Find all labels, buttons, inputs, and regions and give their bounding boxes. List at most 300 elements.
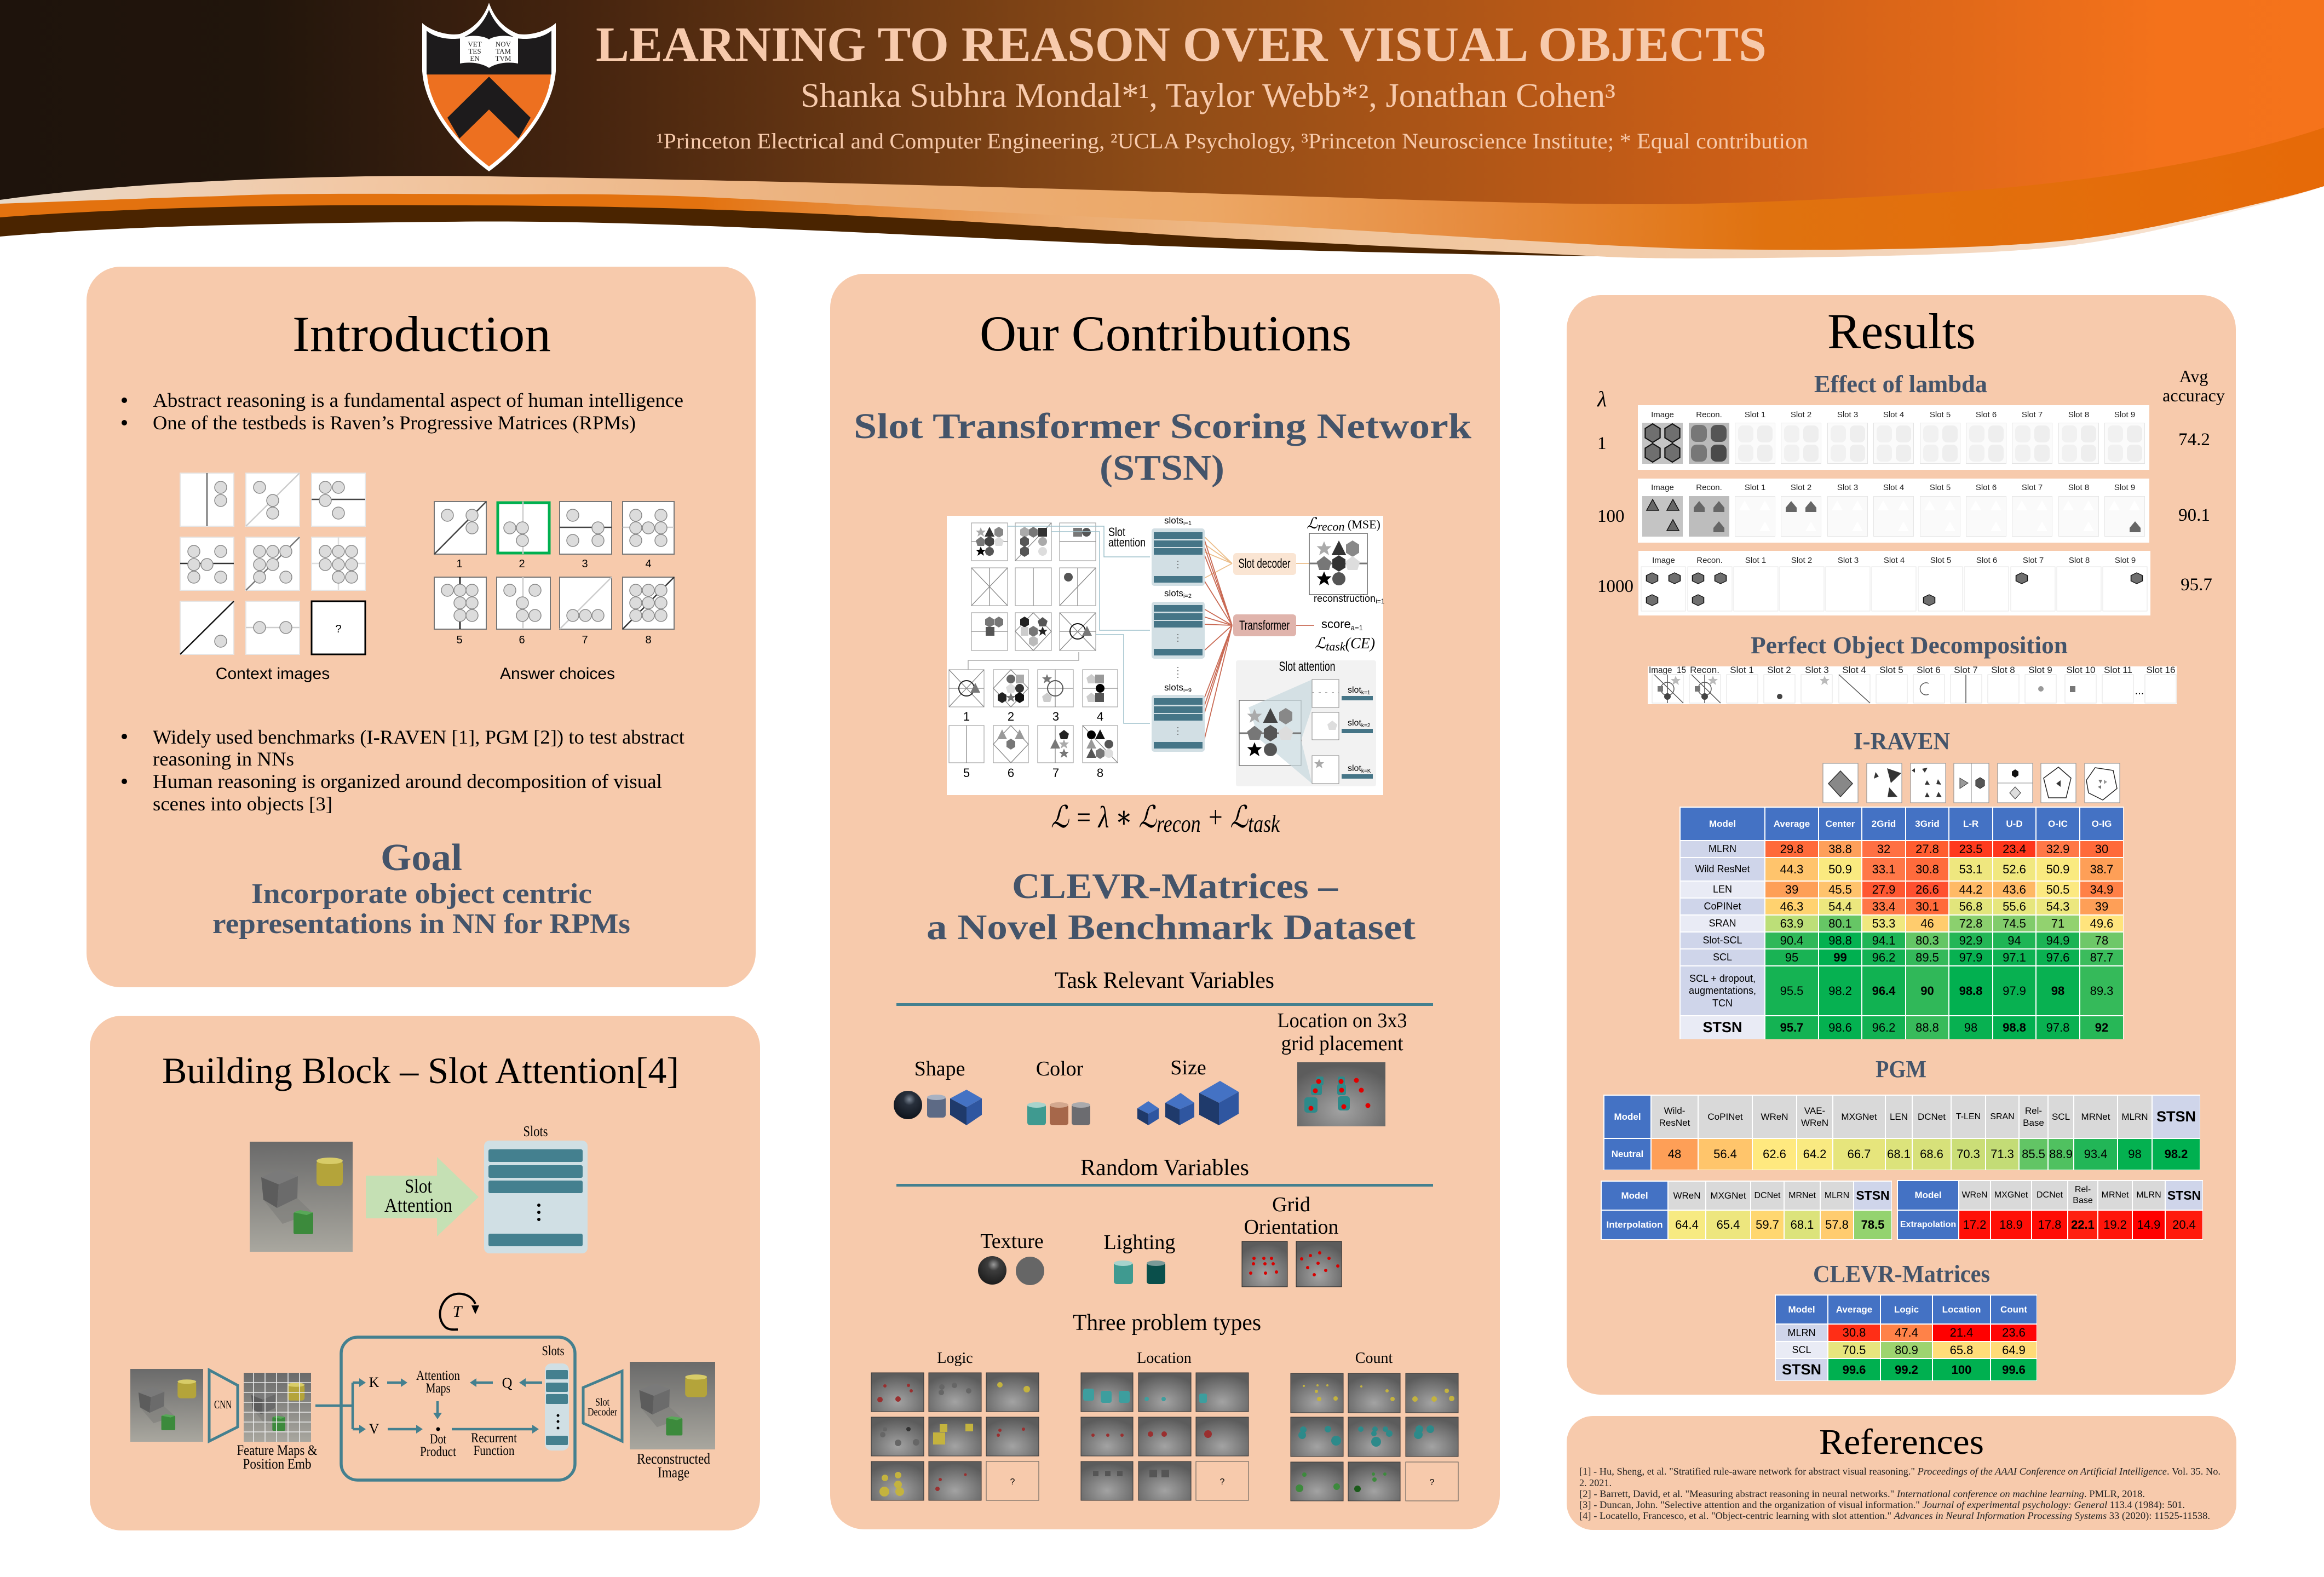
module labels: Recurrent xyxy=(471,1431,517,1446)
goal heading: Goal xyxy=(381,837,462,879)
table: I-RAVEN results: 98.2 xyxy=(1828,984,1852,998)
heading: three problem types: Three problem types xyxy=(1073,1310,1261,1336)
table: PGM extrapolation: Rel- xyxy=(2075,1185,2091,1194)
figure: answer choices: 8 xyxy=(645,634,652,646)
module labels: K xyxy=(369,1374,379,1390)
label: reconstructed image xyxy=(637,1451,710,1481)
labels: losses and outputs: task xyxy=(1326,640,1346,653)
labels: losses and outputs: (CE) xyxy=(1345,635,1375,652)
icon: Princeton shield: TAM xyxy=(496,47,511,55)
reference list: 2. 2021. xyxy=(1579,1477,1612,1488)
labels: random: Lighting xyxy=(1104,1231,1175,1254)
table: PGM neutral: 85.5 xyxy=(2022,1147,2045,1161)
strip: lambda 1: Slot 3 xyxy=(1837,410,1858,419)
loss formula: + ℒ xyxy=(1201,801,1249,834)
table: CLEVR-Matrices: 99.6 xyxy=(2002,1363,2026,1377)
subheading: STSN: Slot Transformer Scoring Network xyxy=(854,406,1471,446)
answer numbers: 3 xyxy=(1052,710,1059,723)
strip: lambda 1 xyxy=(1638,405,2149,470)
table: I-RAVEN results: 74.5 xyxy=(2003,917,2026,930)
table: I-RAVEN results: SCL xyxy=(1713,952,1732,963)
column label: lambda: λ xyxy=(1597,387,1607,411)
label: feature maps: Position Emb xyxy=(243,1456,311,1472)
slot stacks: slots xyxy=(1164,515,1183,526)
strip: decomposition: Slot 1 xyxy=(1730,665,1754,675)
labels: losses and outputs: (MSE) xyxy=(1344,517,1380,531)
table: PGM neutral: DCNet xyxy=(1918,1112,1946,1122)
table: PGM interpolation: 78.5 xyxy=(1861,1218,1884,1231)
strip: lambda 1: Slot 4 xyxy=(1883,410,1904,419)
heading: task relevant variables: Task Relevant Variables xyxy=(1055,968,1274,993)
table: I-RAVEN results: augmentations, xyxy=(1689,985,1756,996)
strip: lambda 1000: Slot 3 xyxy=(1838,556,1859,565)
table: PGM neutral: 93.4 xyxy=(2084,1147,2107,1161)
table: I-RAVEN results: TCN xyxy=(1712,998,1733,1009)
strip: decomposition: Slot 4 xyxy=(1842,665,1866,675)
table: I-RAVEN results: 97.9 xyxy=(2003,984,2026,998)
table: CLEVR-Matrices: 30.8 xyxy=(1843,1326,1866,1339)
answer numbers: 4 xyxy=(1097,710,1103,723)
table: PGM extrapolation: DCNet xyxy=(2037,1190,2063,1200)
table: I-RAVEN results: 96.2 xyxy=(1872,951,1895,964)
table: I-RAVEN results: U-D xyxy=(2006,819,2023,829)
table: I-RAVEN results: O-IG xyxy=(2092,819,2112,829)
labels: losses and outputs: reconstruction xyxy=(1314,593,1376,604)
table: I-RAVEN results: 38.7 xyxy=(2090,862,2113,876)
table: I-RAVEN results: 32.9 xyxy=(2046,842,2069,856)
heading: References xyxy=(1819,1422,1984,1462)
table: I-RAVEN results: 98 xyxy=(2051,984,2064,998)
table: I-RAVEN results: SRAN xyxy=(1709,918,1736,929)
table: PGM interpolation xyxy=(1600,1180,1892,1240)
slot stacks: i=2 xyxy=(1183,593,1192,600)
table: CLEVR-Matrices: Average xyxy=(1836,1304,1872,1315)
table: PGM neutral: MXGNet xyxy=(1841,1112,1877,1122)
labels: slot attention: Slot xyxy=(1108,525,1125,539)
table: I-RAVEN results: 50.5 xyxy=(2046,883,2069,896)
strip: lambda 1000: Recon. xyxy=(1696,556,1723,565)
module labels: Function xyxy=(473,1443,515,1458)
table: PGM interpolation: 65.4 xyxy=(1717,1218,1740,1231)
transformer box xyxy=(1233,614,1296,636)
table: I-RAVEN results: 53.3 xyxy=(1872,917,1895,930)
connectors xyxy=(968,526,1314,745)
labels: task relevant: Location on 3x3 xyxy=(1277,1009,1407,1032)
table: PGM neutral: 56.4 xyxy=(1713,1147,1737,1161)
strip: lambda 1: Slot 9 xyxy=(2114,410,2135,419)
accuracy values: 95.7 xyxy=(2181,575,2212,595)
rule xyxy=(896,1003,1433,1006)
table: PGM neutral: 88.9 xyxy=(2049,1147,2073,1161)
heading: random variables: Random Variables xyxy=(1080,1155,1249,1181)
label: feature maps: Feature Maps & xyxy=(237,1442,318,1458)
table: PGM neutral: Wild- xyxy=(1664,1106,1685,1116)
table: I-RAVEN results: STSN xyxy=(1702,1019,1742,1035)
objects: lighting xyxy=(1114,1261,1165,1284)
inset: slot attention: k=2 xyxy=(1361,723,1371,729)
module labels: Slots xyxy=(542,1344,564,1359)
answer numbers: 5 xyxy=(963,766,970,780)
table: CLEVR-Matrices: STSN xyxy=(1782,1361,1821,1378)
column label: accuracy: accuracy xyxy=(2162,385,2225,405)
figure: answer choices: 1 xyxy=(456,558,463,570)
table: PGM extrapolation: Extrapolation xyxy=(1900,1220,1956,1229)
table: I-RAVEN results: 34.9 xyxy=(2090,883,2113,896)
heading: Our Contributions xyxy=(980,306,1351,361)
table: PGM neutral: SCL xyxy=(2052,1112,2070,1122)
figure: answer choices: 2 xyxy=(519,558,525,570)
slot decoder: Slot xyxy=(595,1396,609,1408)
strip: lambda 1: Slot 7 xyxy=(2022,410,2043,419)
strip: decomposition: Slot 6 xyxy=(1917,665,1941,675)
table: CLEVR-Matrices: 70.5 xyxy=(1843,1343,1866,1357)
labels: problem types: Count xyxy=(1355,1350,1393,1367)
table: I-RAVEN results: 98.8 xyxy=(1828,934,1852,947)
table: CLEVR-Matrices: Logic xyxy=(1894,1304,1919,1315)
table: PGM extrapolation: 14.9 xyxy=(2137,1218,2160,1231)
table: PGM extrapolation: Model xyxy=(1914,1190,1942,1200)
table: PGM interpolation: 64.4 xyxy=(1675,1218,1699,1231)
strip: decomposition: ... xyxy=(2135,685,2144,697)
table: PGM neutral: Base xyxy=(2023,1117,2044,1128)
slot stacks xyxy=(1152,515,1205,752)
accuracy values xyxy=(2178,430,2212,595)
table: PGM extrapolation: MLRN xyxy=(2136,1190,2161,1200)
table: PGM neutral: SRAN xyxy=(1990,1112,2015,1121)
caption: answer choices: Answer choices xyxy=(500,665,615,683)
table: PGM interpolation: 59.7 xyxy=(1756,1218,1779,1231)
labels: task relevant: grid placement xyxy=(1281,1032,1403,1055)
strip: lambda 100: Image xyxy=(1651,483,1674,492)
table: CLEVR-Matrices: Count xyxy=(2000,1304,2027,1315)
answer numbers: 1 xyxy=(963,710,970,723)
bullet list: bottom: scenes into objects [3] xyxy=(153,793,332,815)
table: PGM neutral xyxy=(1603,1094,2200,1170)
goal statement xyxy=(212,878,630,940)
figure: context images: ? xyxy=(335,623,342,635)
strip: decomposition: Slot 8 xyxy=(1991,665,2015,675)
module labels: Q xyxy=(502,1375,513,1391)
table: I-RAVEN results: 89.3 xyxy=(2090,984,2113,998)
table: CLEVR-Matrices: 100 xyxy=(1952,1363,1971,1377)
table: I-RAVEN results: 33.4 xyxy=(1872,900,1895,913)
strip: lambda 100: Slot 1 xyxy=(1745,483,1765,492)
icon: Princeton shield: NOV xyxy=(496,40,511,48)
table: I-RAVEN results: 29.8 xyxy=(1780,842,1803,856)
table: I-RAVEN results: 23.5 xyxy=(1959,842,1982,856)
table: CLEVR-Matrices: 21.4 xyxy=(1950,1326,1973,1339)
table: I-RAVEN results: 97.8 xyxy=(2046,1021,2069,1034)
subheading: I-RAVEN: I-RAVEN xyxy=(1854,728,1950,755)
strip: lambda 1: Image xyxy=(1651,410,1674,419)
table: I-RAVEN results: LEN xyxy=(1713,884,1732,895)
arrow: slot attention: Attention xyxy=(384,1194,452,1216)
table: PGM neutral: 48 xyxy=(1668,1147,1681,1161)
table: CLEVR-Matrices: 80.9 xyxy=(1895,1343,1918,1357)
inset: slot attention xyxy=(1236,659,1376,786)
grid: count: ? xyxy=(1430,1478,1435,1487)
rule xyxy=(896,1184,1433,1187)
accuracy values: 90.1 xyxy=(2178,505,2210,525)
strip: decomposition: Slot 16 xyxy=(2147,665,2175,675)
table: I-RAVEN results: 38.8 xyxy=(1828,842,1852,856)
table: I-RAVEN results: 97.1 xyxy=(2003,951,2026,964)
slot stacks: i=9 xyxy=(1183,687,1192,694)
icon: Princeton shield: EN xyxy=(470,54,480,62)
strip: lambda 100: Slot 5 xyxy=(1930,483,1951,492)
loss formula: ℒ = λ ∗ ℒ xyxy=(1051,801,1181,834)
table: PGM extrapolation: 17.8 xyxy=(2038,1218,2061,1231)
strip: lambda 100: Slot 9 xyxy=(2114,483,2135,492)
labels: slot attention: attention xyxy=(1108,536,1146,549)
subheading: PGM: PGM xyxy=(1876,1056,1926,1083)
table: CLEVR-Matrices: 65.8 xyxy=(1950,1343,1973,1357)
labels: problem types: Location xyxy=(1137,1350,1192,1367)
labels: problem types xyxy=(937,1350,1393,1367)
slot attention module box xyxy=(341,1337,575,1480)
table: I-RAVEN results: 46 xyxy=(1920,917,1934,930)
subheading: effect of lambda: Effect of lambda xyxy=(1814,371,1987,398)
table: PGM neutral: Rel- xyxy=(2025,1106,2042,1116)
image: reconstructed xyxy=(630,1362,715,1449)
table: PGM neutral: Neutral xyxy=(1612,1149,1643,1159)
table: I-RAVEN results: 27.8 xyxy=(1915,842,1939,856)
table: I-RAVEN results: 30.1 xyxy=(1915,900,1939,913)
goal statement: representations in NN for RPMs xyxy=(212,908,630,940)
table: I-RAVEN results: 52.6 xyxy=(2003,862,2026,876)
subheading: CLEVR-Matrices results: CLEVR-Matrices xyxy=(1813,1261,1990,1287)
table: PGM neutral: 98.2 xyxy=(2165,1147,2188,1161)
dot product marker xyxy=(436,1427,440,1431)
strip: lambda 1000: Image xyxy=(1652,556,1675,565)
table: I-RAVEN results: 90 xyxy=(1920,984,1934,998)
icon: Princeton shield: TES xyxy=(468,47,481,55)
slot stacks: i=1 xyxy=(1183,520,1192,527)
bullet list: bottom: Human reasoning is organized around decomposition of visual xyxy=(153,770,662,792)
table: I-RAVEN results: CoPINet xyxy=(1704,901,1741,912)
strip: lambda 1000: Slot 2 xyxy=(1791,556,1812,565)
table: PGM extrapolation: 20.4 xyxy=(2172,1218,2196,1231)
table: I-RAVEN results: 39 xyxy=(2095,900,2108,913)
bullet list: bottom: reasoning in NNs xyxy=(153,748,294,770)
table: PGM interpolation: MRNet xyxy=(1788,1190,1816,1200)
table: I-RAVEN results: 95.5 xyxy=(1780,984,1803,998)
subheading: CLEVR-Matrices: a Novel Benchmark Dataset xyxy=(927,907,1416,947)
module labels: Product xyxy=(420,1444,456,1459)
icon: iteration loop T: T xyxy=(453,1303,463,1321)
objects: color xyxy=(1027,1102,1090,1125)
reference list: [2] - Barrett, David, et al. "Measuring abstract reasoning in neural networks." International conference on machine learning . PMLR, 2018. xyxy=(1579,1488,2145,1499)
slot stacks: slots xyxy=(1164,682,1183,693)
table: I-RAVEN results: 50.9 xyxy=(1828,862,1852,876)
reconstruction panel xyxy=(1309,533,1367,595)
table: PGM neutral: CoPINet xyxy=(1707,1112,1743,1122)
strip: lambda 100: Slot 4 xyxy=(1883,483,1904,492)
inset: slot attention: slot xyxy=(1348,718,1361,728)
strip: lambda 1: Slot 8 xyxy=(2068,410,2089,419)
label: reconstructed image: Reconstructed xyxy=(637,1451,710,1467)
panel: building block slot attention xyxy=(90,1016,760,1530)
strip: lambda 1000: Slot 8 xyxy=(2069,556,2090,565)
table: I-RAVEN results: 80.1 xyxy=(1828,917,1852,930)
transformer box: Transformer xyxy=(1239,618,1290,633)
table: I-RAVEN results: 87.7 xyxy=(2090,951,2113,964)
affiliations: ¹Princeton Electrical and Computer Engineering, ²UCLA Psychology, ³Princeton Neuroscience Institute; * Equal contribution xyxy=(657,129,1808,153)
table: I-RAVEN results: 99 xyxy=(1833,951,1847,964)
table: PGM neutral: MRNet xyxy=(2081,1112,2110,1122)
labels: task relevant: Color xyxy=(1036,1057,1084,1080)
strip: decomposition: Slot 5 xyxy=(1879,665,1903,675)
table: I-RAVEN results: 54.3 xyxy=(2046,900,2069,913)
slot decoder xyxy=(583,1371,622,1441)
grid: logic: ? xyxy=(1010,1477,1015,1487)
labels: losses and outputs: i=1 xyxy=(1376,597,1385,605)
strip: lambda 1000: Slot 9 xyxy=(2115,556,2136,565)
labels: random: Texture xyxy=(980,1230,1044,1253)
grid: count xyxy=(1291,1373,1458,1501)
table: I-RAVEN results: 2Grid xyxy=(1872,819,1896,829)
labels: random: Grid xyxy=(1272,1193,1310,1216)
table: I-RAVEN results: Wild ResNet xyxy=(1695,864,1750,874)
strip: lambda 1: Slot 6 xyxy=(1976,410,1997,419)
table: I-RAVEN results: 53.1 xyxy=(1959,862,1982,876)
table: I-RAVEN results: 33.1 xyxy=(1872,862,1895,876)
figure: answer choices: 4 xyxy=(645,558,652,570)
goal statement: Incorporate object centric xyxy=(251,878,592,910)
subheading: CLEVR-Matrices xyxy=(927,866,1416,947)
table: I-RAVEN results: 88.8 xyxy=(1915,1021,1939,1034)
strip: lambda 1000: Slot 6 xyxy=(1976,556,1997,565)
inset: slot attention: slot xyxy=(1348,686,1361,695)
bullet list: bottom xyxy=(122,726,684,815)
loss formula: task xyxy=(1248,810,1280,837)
table: I-RAVEN results: 97.9 xyxy=(1959,951,1982,964)
table: PGM interpolation: DCNet xyxy=(1754,1190,1781,1200)
strip: decomposition: Slot 10 xyxy=(2067,665,2095,675)
table: PGM neutral: STSN xyxy=(2156,1108,2196,1125)
slots stack: Slots xyxy=(524,1123,548,1139)
table: PGM neutral: T-LEN xyxy=(1956,1112,1981,1121)
column label: accuracy: Avg xyxy=(2179,366,2208,386)
labels: task relevant: Shape xyxy=(914,1057,965,1080)
arrow: slot attention: Slot xyxy=(405,1175,432,1197)
table: I-RAVEN results: Average xyxy=(1774,819,1810,829)
table: I-RAVEN results: 89.5 xyxy=(1915,951,1939,964)
table: PGM interpolation: MXGNet xyxy=(1710,1190,1746,1201)
labels: losses and outputs: ℒ xyxy=(1315,635,1326,652)
labels: losses and outputs: ℒ xyxy=(1307,515,1318,532)
icon: iteration loop T xyxy=(440,1294,479,1329)
table: PGM interpolation: 68.1 xyxy=(1791,1218,1814,1231)
bullet list: top: One of the testbeds is Raven’s Progressive Matrices (RPMs) xyxy=(153,412,636,434)
table: PGM neutral: ResNet xyxy=(1659,1117,1690,1128)
table: I-RAVEN results: 46.3 xyxy=(1780,900,1803,913)
table: I-RAVEN results: 32 xyxy=(1877,842,1890,856)
inset: slot attention: k=K xyxy=(1361,768,1371,774)
table: PGM interpolation: STSN xyxy=(1856,1188,1890,1202)
accuracy values: 74.2 xyxy=(2178,430,2210,450)
strip: decomposition: Slot 3 xyxy=(1805,665,1829,675)
labels: random: Orientation xyxy=(1244,1216,1339,1239)
labels: losses and outputs xyxy=(1307,515,1385,653)
caption: context images: Context images xyxy=(216,665,330,683)
icons: I-RAVEN configurations xyxy=(1823,763,2120,803)
table: CLEVR-Matrices: Location xyxy=(1942,1304,1981,1315)
module labels: Maps xyxy=(426,1381,450,1396)
bullet list: top xyxy=(122,389,683,434)
table: PGM extrapolation: 18.9 xyxy=(1999,1218,2023,1231)
table: I-RAVEN results: 78 xyxy=(2095,934,2108,947)
reference list: [4] - Locatello, Francesco, et al. "Object-centric learning with slot attention." Advances in Neural Information Processing Systems 33 (2020): 11525-11538. xyxy=(1579,1510,2210,1522)
table: PGM extrapolation xyxy=(1896,1179,2203,1240)
table: CLEVR-Matrices: 47.4 xyxy=(1895,1326,1918,1339)
table: I-RAVEN results: 92.9 xyxy=(1959,934,1982,947)
icon: Princeton shield: VET xyxy=(468,40,482,48)
table: PGM neutral: LEN xyxy=(1890,1112,1908,1122)
table: I-RAVEN results: 56.8 xyxy=(1959,900,1982,913)
table: I-RAVEN results: 44.3 xyxy=(1780,862,1803,876)
answer numbers: 2 xyxy=(1008,710,1014,723)
table: I-RAVEN results: O-IC xyxy=(2048,819,2068,829)
grid: location: ? xyxy=(1220,1477,1225,1487)
table: I-RAVEN results: L-R xyxy=(1963,819,1978,829)
table: CLEVR-Matrices: 99.2 xyxy=(1895,1363,1918,1377)
table: CLEVR-Matrices: 99.6 xyxy=(1843,1363,1866,1377)
table: I-RAVEN results: 44.2 xyxy=(1959,883,1982,896)
slot decoder box xyxy=(1233,553,1296,575)
table: PGM extrapolation: MXGNet xyxy=(1994,1190,2028,1200)
strip: lambda 1: Slot 5 xyxy=(1930,410,1951,419)
image: input scene xyxy=(250,1142,353,1252)
strip: decomposition: Slot 9 xyxy=(2028,665,2052,675)
table: I-RAVEN results: 27.9 xyxy=(1872,883,1895,896)
strip: lambda 100: Slot 7 xyxy=(2022,483,2043,492)
table: I-RAVEN results: 23.4 xyxy=(2003,842,2026,856)
lambda values: 100 xyxy=(1597,507,1624,526)
table: PGM neutral: 71.3 xyxy=(1991,1147,2014,1161)
table: PGM neutral: VAE- xyxy=(1804,1106,1825,1116)
panel: introduction xyxy=(87,267,756,987)
label: reconstructed image: Image xyxy=(658,1464,689,1481)
strip: lambda 1000: Slot 5 xyxy=(1930,556,1951,565)
objects: texture xyxy=(978,1256,1044,1285)
image: small input xyxy=(130,1369,203,1442)
bullet list: bottom: Widely used benchmarks (I-RAVEN [1], PGM [2]) to test abstract xyxy=(153,726,684,748)
table: I-RAVEN results: Center xyxy=(1826,819,1855,829)
table: PGM neutral: 70.3 xyxy=(1957,1147,1980,1161)
table: PGM neutral: 98 xyxy=(2128,1147,2142,1161)
strip: lambda 1: Slot 2 xyxy=(1791,410,1811,419)
table: PGM extrapolation: STSN xyxy=(2167,1188,2201,1202)
table: PGM interpolation: MLRN xyxy=(1825,1190,1849,1200)
table: I-RAVEN results: 39 xyxy=(1785,883,1798,896)
strip: lambda 100: Recon. xyxy=(1696,483,1722,492)
icon: Princeton shield xyxy=(422,3,556,171)
table: PGM extrapolation: WReN xyxy=(1961,1190,1988,1200)
strip: decomposition xyxy=(1648,665,2177,704)
column label: accuracy xyxy=(2162,366,2225,405)
subheading: CLEVR-Matrices: CLEVR-Matrices – xyxy=(1012,866,1338,906)
labels: losses and outputs: a=1 xyxy=(1351,624,1363,632)
table: CLEVR-Matrices: MLRN xyxy=(1787,1327,1816,1338)
module labels: V xyxy=(369,1421,379,1437)
module labels: Dot xyxy=(430,1432,446,1447)
bullet list: top: Abstract reasoning is a fundamental aspect of human intelligence xyxy=(153,389,683,411)
table: I-RAVEN results: 49.6 xyxy=(2090,917,2113,930)
table: PGM extrapolation: Base xyxy=(2073,1196,2093,1205)
subheading: perfect object decomposition: Perfect Object Decomposition xyxy=(1751,632,2068,659)
table: PGM extrapolation: MRNet xyxy=(2102,1190,2129,1200)
